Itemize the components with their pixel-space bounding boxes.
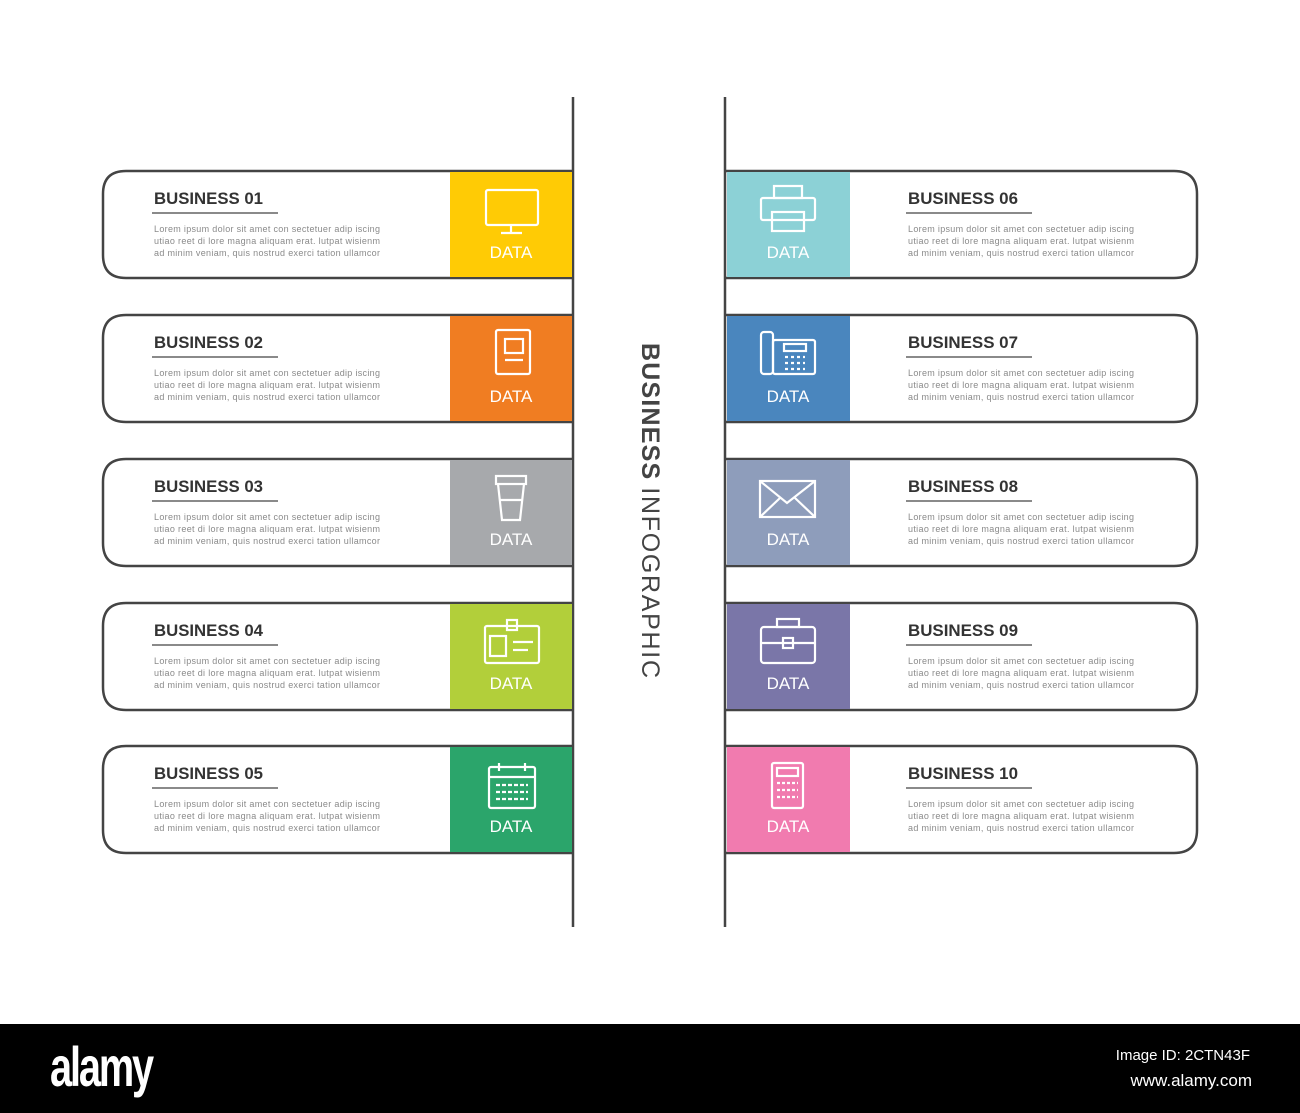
card: business 07: ad minim veniam, quis nostrud exerci tation ullamcor	[908, 392, 1134, 402]
icon: id card	[485, 620, 539, 663]
card: business 04	[103, 603, 573, 710]
card: business 08: BUSINESS 08	[908, 478, 1018, 496]
card: business 03	[103, 459, 573, 566]
card: business 04: BUSINESS 04	[154, 622, 264, 640]
card: business 09: BUSINESS 09	[908, 622, 1018, 640]
card: business 09	[725, 603, 1197, 710]
card: business 10: Lorem ipsum dolor sit amet con sectetuer adip iscing	[908, 799, 1134, 809]
card: business 01	[103, 171, 573, 278]
card: business 04: DATA	[490, 674, 533, 693]
right vertical line	[724, 97, 726, 927]
card: business 01: DATA	[490, 243, 533, 262]
card: business 08: ad minim veniam, quis nostrud exerci tation ullamcor	[908, 536, 1134, 546]
card: business 09: ad minim veniam, quis nostrud exerci tation ullamcor	[908, 680, 1134, 690]
card: business 01: BUSINESS 01	[154, 190, 263, 208]
card: business 10: ad minim veniam, quis nostrud exerci tation ullamcor	[908, 823, 1134, 833]
icon: monitor	[486, 190, 538, 233]
card: business 06: BUSINESS 06	[908, 190, 1018, 208]
card: business 01: utiao reet di lore magna aliquam erat. lutpat wisienm	[154, 236, 380, 246]
card: business 08: DATA	[767, 530, 810, 549]
icon: notebook	[496, 330, 530, 374]
icon: briefcase	[761, 619, 815, 663]
card: business 02: utiao reet di lore magna aliquam erat. lutpat wisienm	[154, 380, 380, 390]
card: business 01: ad minim veniam, quis nostrud exerci tation ullamcor	[154, 248, 380, 258]
card: business 06	[725, 171, 1197, 278]
image id text: Image ID: 2CTN43F	[1116, 1047, 1250, 1064]
card: business 03: Lorem ipsum dolor sit amet con sectetuer adip iscing	[154, 512, 380, 522]
card: business 03: DATA	[490, 530, 533, 549]
card: business 07: utiao reet di lore magna aliquam erat. lutpat wisienm	[908, 380, 1134, 390]
card: business 01: Lorem ipsum dolor sit amet con sectetuer adip iscing	[154, 224, 380, 234]
card: business 05: utiao reet di lore magna aliquam erat. lutpat wisienm	[154, 811, 380, 821]
card: business 05: ad minim veniam, quis nostrud exerci tation ullamcor	[154, 823, 380, 833]
card: business 10	[725, 746, 1197, 853]
card: business 04: utiao reet di lore magna aliquam erat. lutpat wisienm	[154, 668, 380, 678]
card: business 03: ad minim veniam, quis nostrud exerci tation ullamcor	[154, 536, 380, 546]
icon: envelope	[760, 481, 815, 517]
card: business 05	[103, 746, 573, 853]
card: business 04: ad minim veniam, quis nostrud exerci tation ullamcor	[154, 680, 380, 690]
card: business 02: ad minim veniam, quis nostrud exerci tation ullamcor	[154, 392, 380, 402]
card: business 09: utiao reet di lore magna aliquam erat. lutpat wisienm	[908, 668, 1134, 678]
card: business 03: BUSINESS 03	[154, 478, 263, 496]
card: business 10: utiao reet di lore magna aliquam erat. lutpat wisienm	[908, 811, 1134, 821]
card: business 06: utiao reet di lore magna aliquam erat. lutpat wisienm	[908, 236, 1134, 246]
card: business 02	[103, 315, 573, 422]
icon: telephone	[761, 332, 815, 374]
icon: calendar	[489, 763, 535, 808]
card: business 10: DATA	[767, 817, 810, 836]
card: business 07	[725, 315, 1197, 422]
vertical title: BUSINESS INFOGRAPHIC	[636, 343, 664, 680]
card: business 06: Lorem ipsum dolor sit amet con sectetuer adip iscing	[908, 224, 1134, 234]
icon: printer	[761, 186, 815, 231]
card: business 09: Lorem ipsum dolor sit amet con sectetuer adip iscing	[908, 656, 1134, 666]
card: business 02: DATA	[490, 387, 533, 406]
card: business 07: Lorem ipsum dolor sit amet con sectetuer adip iscing	[908, 368, 1134, 378]
left vertical line	[572, 97, 574, 927]
card: business 08: Lorem ipsum dolor sit amet con sectetuer adip iscing	[908, 512, 1134, 522]
card: business 07: DATA	[767, 387, 810, 406]
logo: alamy: alamy	[50, 1035, 154, 1098]
icon: calculator	[772, 763, 803, 808]
card: business 08: utiao reet di lore magna aliquam erat. lutpat wisienm	[908, 524, 1134, 534]
card: business 06: ad minim veniam, quis nostrud exerci tation ullamcor	[908, 248, 1134, 258]
icon: cup	[496, 476, 526, 520]
card: business 09: DATA	[767, 674, 810, 693]
card: business 06: DATA	[767, 243, 810, 262]
card: business 02: BUSINESS 02	[154, 334, 263, 352]
card: business 04: Lorem ipsum dolor sit amet con sectetuer adip iscing	[154, 656, 380, 666]
footer bar	[0, 1024, 1300, 1113]
card: business 05: Lorem ipsum dolor sit amet con sectetuer adip iscing	[154, 799, 380, 809]
card: business 02: Lorem ipsum dolor sit amet con sectetuer adip iscing	[154, 368, 380, 378]
website text: www.alamy.com	[1129, 1071, 1252, 1090]
card: business 08	[725, 459, 1197, 566]
card: business 03: utiao reet di lore magna aliquam erat. lutpat wisienm	[154, 524, 380, 534]
card: business 10: BUSINESS 10	[908, 765, 1018, 783]
card: business 05: BUSINESS 05	[154, 765, 263, 783]
card: business 05: DATA	[490, 817, 533, 836]
card: business 07: BUSINESS 07	[908, 334, 1018, 352]
